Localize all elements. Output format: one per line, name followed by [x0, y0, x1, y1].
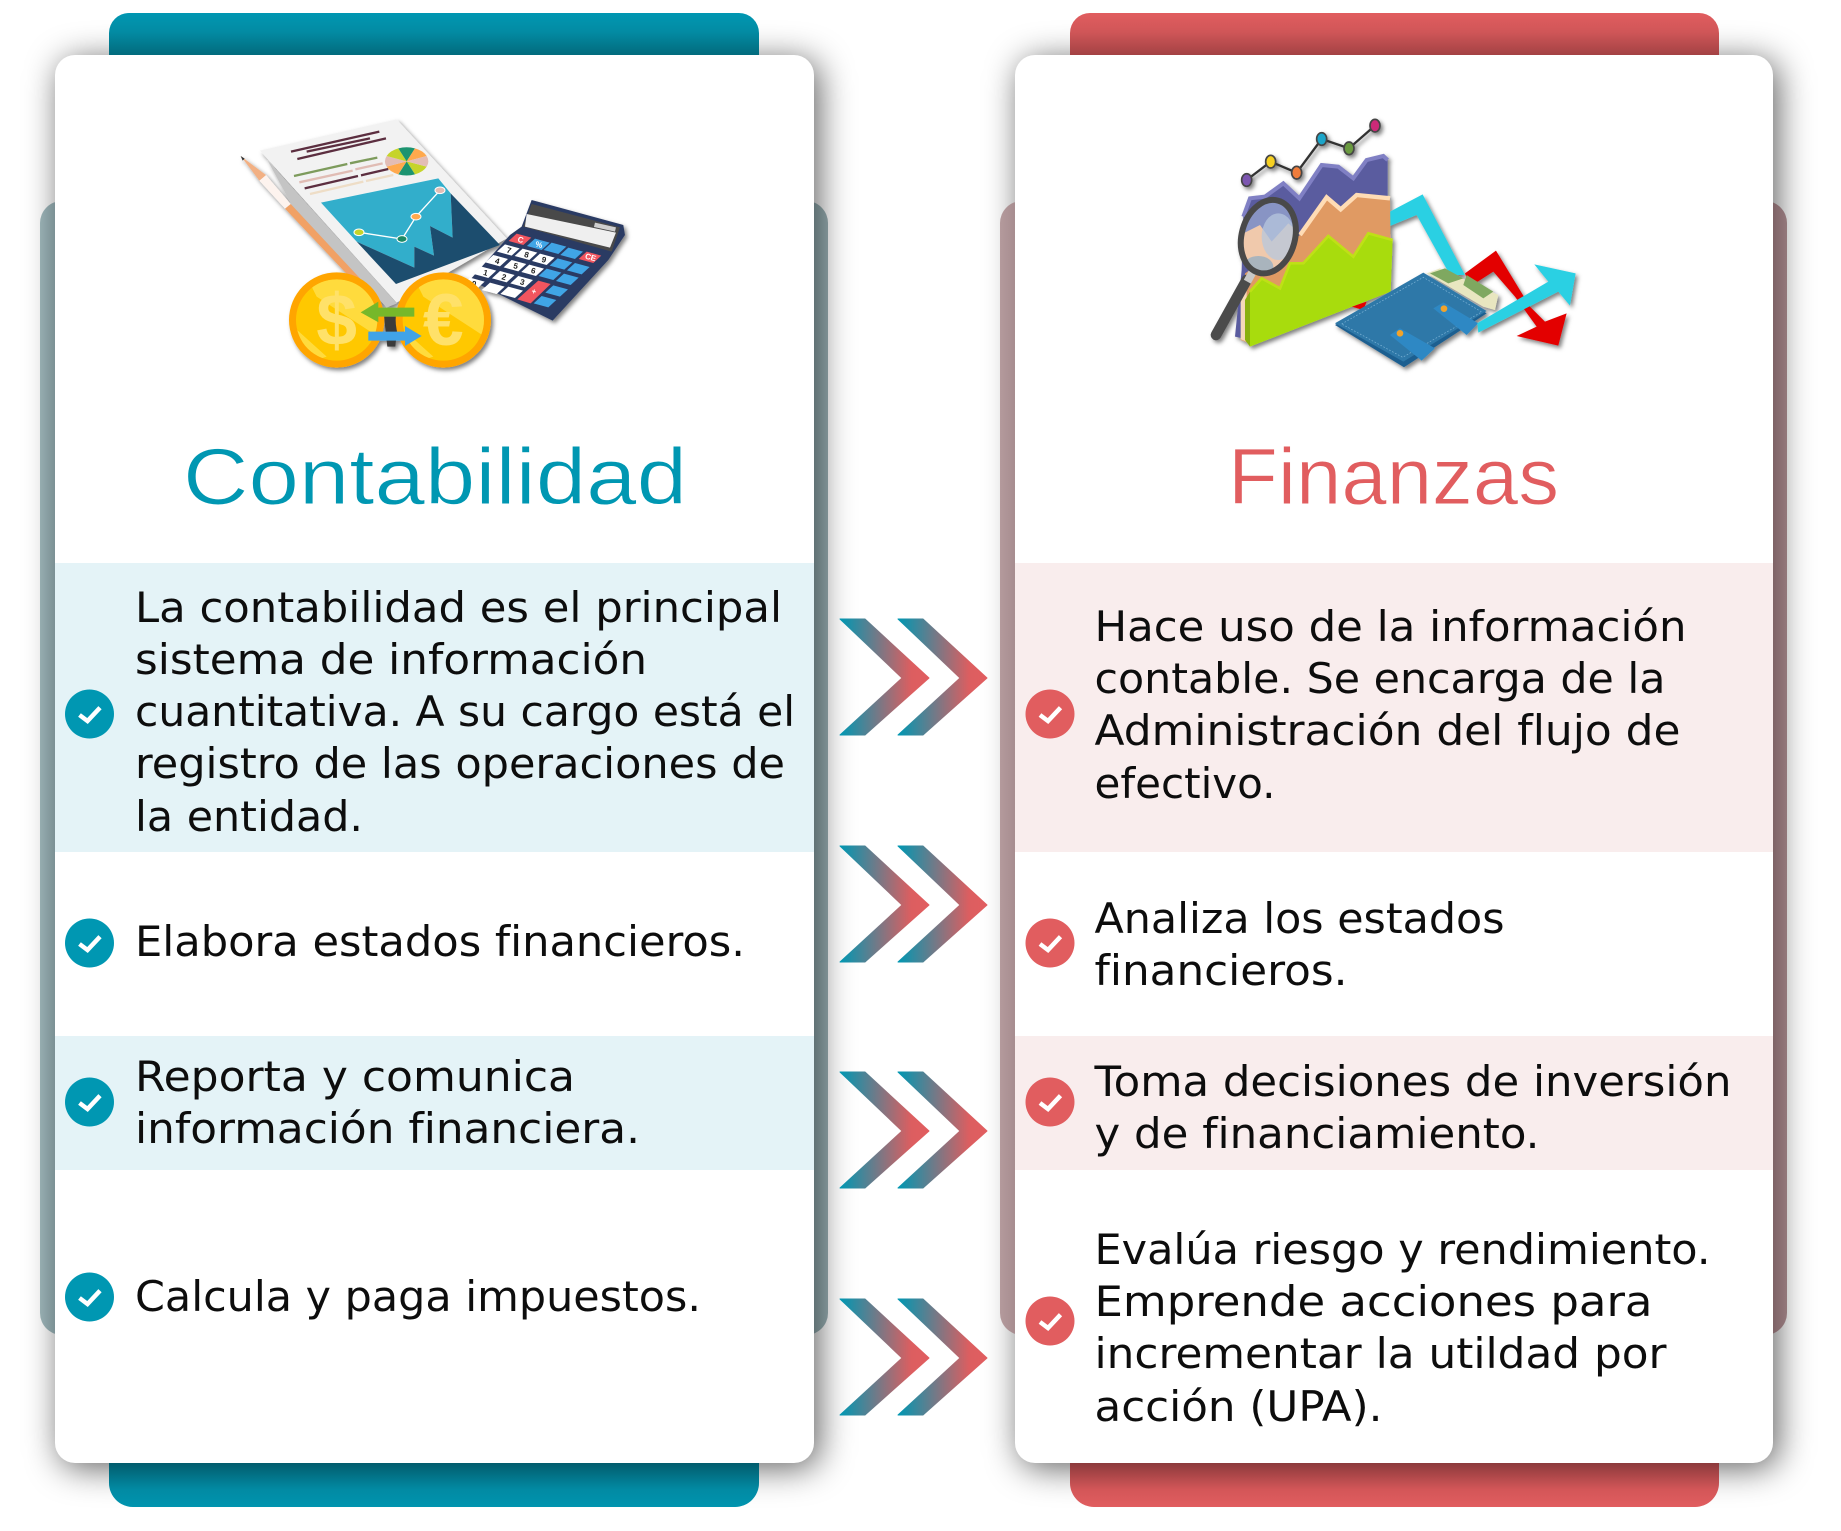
item: analiza: financieros. — [1094, 946, 1348, 995]
item: riesgo y rendimiento: Evalúa riesgo y rendimiento. — [1094, 1225, 1710, 1274]
arrow: chevrons row 1 — [840, 619, 987, 735]
item: estados financieros: Elabora estados financieros. — [135, 917, 745, 966]
row background 3 — [1015, 1036, 1773, 1170]
calculator: 2 — [501, 272, 508, 282]
item: sistema de información: cuantitativa. A su cargo está el — [135, 687, 795, 736]
cyan down arrow band — [1387, 194, 1465, 275]
magnifying glass — [1216, 193, 1304, 335]
calculator: % — [534, 240, 544, 250]
item: flujo de efectivo: Hace uso de la información — [1094, 602, 1686, 651]
calculator: 6 — [530, 266, 537, 276]
coins with exchange arrows: $ — [316, 279, 357, 361]
item: flujo de efectivo: contable. Se encarga de la — [1094, 654, 1666, 703]
item: sistema de información — [65, 583, 795, 841]
area chart — [1235, 156, 1393, 347]
calculator: 3 — [519, 277, 526, 287]
title: Contabilidad: Contabilidad — [183, 432, 687, 521]
item: reporta — [65, 1052, 640, 1153]
item: sistema de información: registro de las operaciones de — [135, 739, 785, 788]
calculator: CE — [584, 252, 598, 264]
item: flujo de efectivo: efectivo. — [1094, 759, 1276, 808]
item: reporta: Reporta y comunica — [135, 1052, 575, 1101]
calculator: 1 — [482, 268, 489, 278]
item: riesgo y rendimiento: incrementar la utildad por — [1094, 1329, 1667, 1378]
calculator: 7 — [506, 246, 513, 256]
calculator: 0 — [471, 279, 478, 289]
row background 3 — [55, 1036, 814, 1170]
item: sistema de información: la entidad. — [135, 792, 363, 841]
calculator: 4 — [494, 256, 501, 266]
item: riesgo y rendimiento — [1026, 1225, 1710, 1431]
calculator: 9 — [541, 255, 548, 265]
calculator — [462, 200, 625, 321]
item: impuestos: Calcula y paga impuestos. — [135, 1272, 701, 1321]
wallet with banknotes — [1335, 268, 1498, 367]
arrow: chevrons row 3 — [840, 1072, 987, 1188]
item: reporta: información financiera. — [135, 1104, 640, 1153]
item: flujo de efectivo: Administración del flujo de — [1094, 706, 1680, 755]
coins with exchange arrows — [287, 272, 491, 368]
icon: reports, calculator and coins — [241, 119, 625, 368]
item: flujo de efectivo — [1026, 602, 1686, 808]
calculator: + — [531, 287, 538, 297]
item: riesgo y rendimiento: acción (UPA). — [1094, 1382, 1382, 1431]
row background 1 — [1015, 563, 1773, 852]
pencil — [241, 156, 360, 282]
item: decisiones — [1026, 1057, 1732, 1158]
calculator: C — [517, 235, 525, 245]
panel: contabilidad — [40, 13, 828, 1507]
calculator: 8 — [523, 250, 530, 260]
item: sistema de información: sistema de información — [135, 635, 647, 684]
item: analiza — [1026, 894, 1504, 995]
row background 1 — [55, 563, 814, 852]
item: decisiones: Toma decisiones de inversión — [1093, 1057, 1732, 1106]
item: analiza: Analiza los estados — [1094, 894, 1504, 943]
calculator: 5 — [512, 261, 519, 271]
document — [260, 119, 507, 307]
panel: finanzas — [1000, 13, 1787, 1507]
item: riesgo y rendimiento: Emprende acciones para — [1094, 1277, 1652, 1326]
cyan up arrow — [1477, 264, 1576, 333]
line chart — [1242, 119, 1380, 186]
title: Finanzas: Finanzas — [1228, 432, 1559, 521]
coins with exchange arrows: € — [423, 279, 464, 361]
arrow: chevrons row 2 — [840, 846, 987, 962]
icon: charts, wallet and arrows — [1216, 119, 1576, 367]
red arrow — [1465, 251, 1567, 346]
item: decisiones: y de financiamiento. — [1094, 1109, 1540, 1158]
item: sistema de información: La contabilidad es el principal — [135, 583, 782, 632]
arrow: chevrons row 4 — [840, 1299, 987, 1415]
